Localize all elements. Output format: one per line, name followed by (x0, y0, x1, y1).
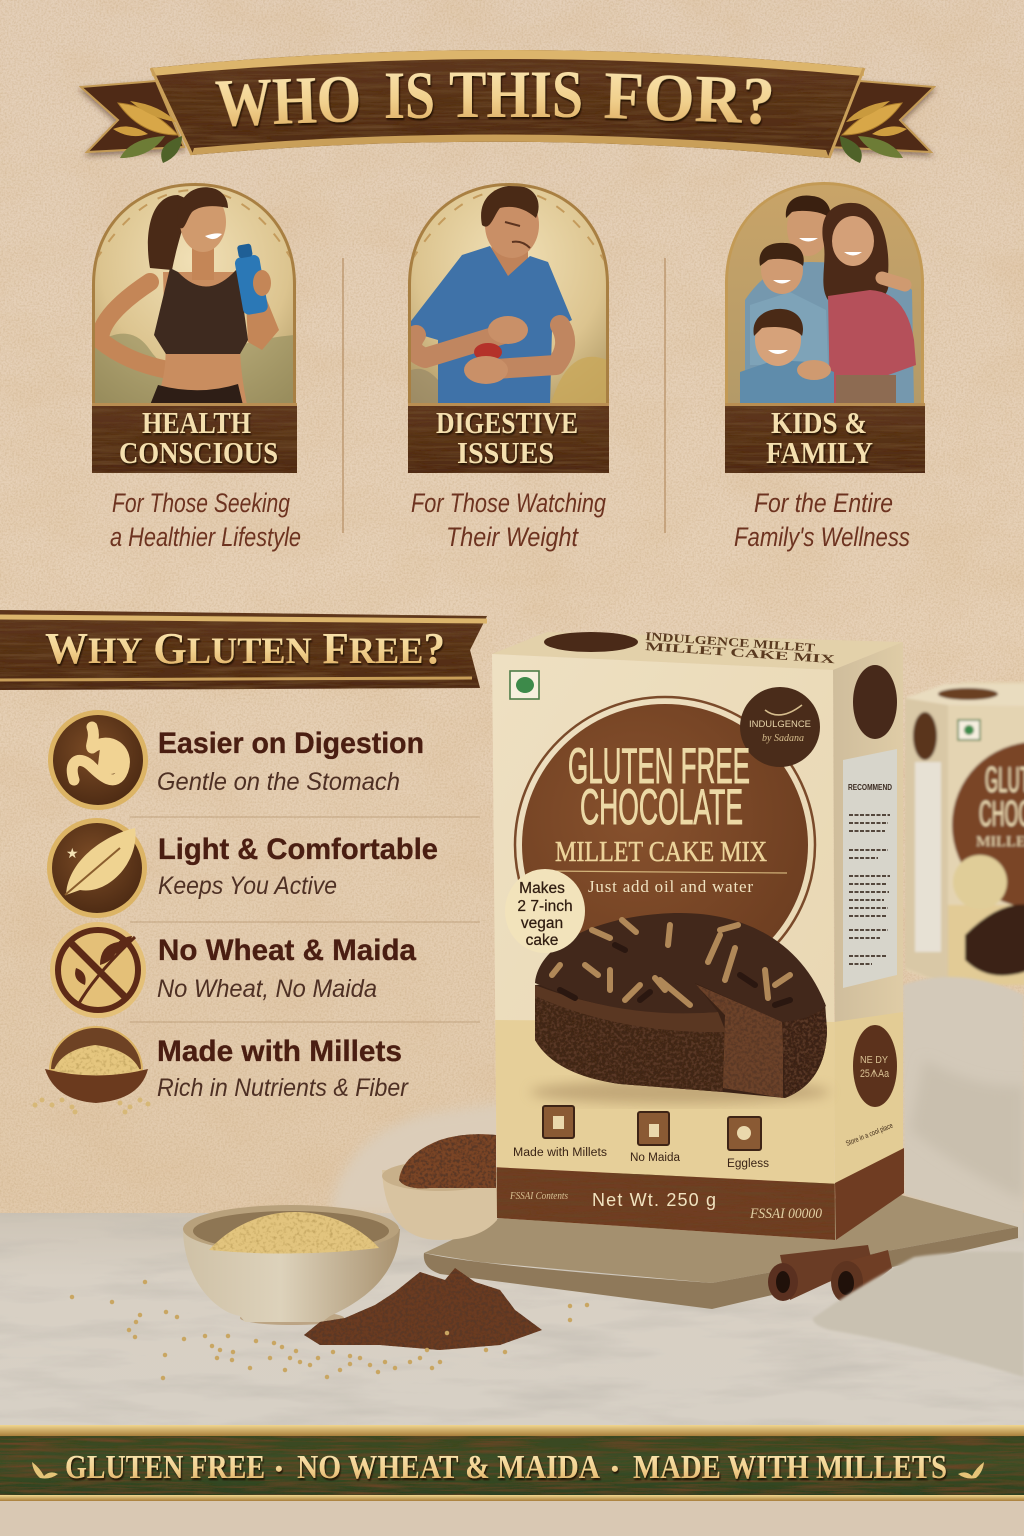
heading: No Wheat & Maida (158, 934, 416, 967)
strip text (65, 1449, 947, 1486)
arch illustration: family portrait (725, 180, 925, 410)
product name: CHOCOLATE (580, 779, 743, 835)
product name: Just add oil and water (588, 877, 753, 896)
makes badge: cake (526, 932, 558, 949)
net weight strip: Net Wt. 250 g (592, 1190, 716, 1210)
side net weight badge (853, 1025, 897, 1107)
net weight strip: FSSAI Contents (509, 1191, 568, 1202)
feature: made with millets (35, 1027, 410, 1112)
heading: Made with Millets (157, 1035, 402, 1068)
left arm (100, 282, 180, 372)
logo badge: by Sadana (762, 733, 804, 744)
icon: crossed wheat (50, 922, 146, 1018)
heading: Light & Comfortable (158, 833, 438, 866)
scattered millet grains (72, 1282, 587, 1378)
subtext: Gentle on the Stomach (157, 768, 400, 796)
label plate (725, 403, 925, 473)
caption: Their Weight (446, 522, 579, 552)
caption: For Those Watching (411, 488, 606, 518)
stone board (424, 1195, 1018, 1309)
scene: table surface (0, 1100, 1024, 1428)
label text (436, 405, 578, 470)
label text: HEALTH (142, 405, 251, 440)
boy two (740, 360, 834, 405)
label text: ISSUES (457, 435, 554, 470)
wheat left (113, 101, 182, 163)
side small print: Store in a cool place (844, 1121, 894, 1148)
feature icons on box: Made with Millets (513, 1147, 607, 1159)
right arm (246, 300, 279, 350)
hands (488, 316, 528, 344)
mom (822, 203, 889, 301)
caption (110, 488, 301, 552)
right arm (480, 325, 565, 370)
head (180, 206, 226, 252)
side info panel (843, 749, 897, 988)
title: WHO (214, 60, 362, 141)
neck (192, 248, 214, 272)
label text: KIDS & (771, 405, 867, 440)
strip text: • (275, 1456, 283, 1481)
box side (833, 642, 903, 1240)
product name: MILLET CAKE MIX (555, 837, 767, 868)
icon: bowl of millets (35, 1027, 148, 1112)
why gluten free banner (0, 610, 487, 690)
background box text: MILLE (976, 834, 1024, 850)
feature icons on box: No Maida (630, 1152, 681, 1164)
product name: GLUTEN FREE (568, 738, 750, 794)
head (485, 206, 539, 258)
card: health conscious (90, 180, 301, 552)
linen behind bowls (330, 1100, 520, 1215)
banner right tail (828, 81, 934, 152)
strip icon left (32, 1462, 58, 1478)
product box (490, 629, 904, 1245)
subtext: No Wheat, No Maida (157, 975, 377, 1003)
caption: For Those Seeking (112, 488, 290, 518)
makes badge: Makes (519, 880, 565, 897)
wheat right (840, 101, 907, 163)
cake right crust (782, 1008, 827, 1098)
torso (161, 272, 246, 403)
boy one (750, 292, 828, 365)
cocoa pile (304, 1268, 542, 1350)
label text (119, 405, 278, 470)
cocoa heap (399, 1134, 496, 1188)
side net weight badge: 25ᗑAa (860, 1068, 890, 1080)
logo badge: INDULGENCE (749, 719, 811, 730)
feature: no wheat and maida (50, 922, 416, 1018)
side logo (853, 665, 897, 739)
shorts (150, 384, 242, 403)
divider lines (343, 258, 665, 533)
folded cloth lower right (813, 1252, 1024, 1377)
caption (411, 488, 606, 552)
hand on bottle (253, 270, 271, 296)
cake glaze band (535, 985, 726, 1032)
title: THIS (449, 56, 583, 132)
large millet bowl (183, 1205, 400, 1325)
icon: stomach (48, 710, 148, 810)
side info panel: RECOMMEND (848, 783, 892, 792)
title: IS (384, 57, 435, 133)
subtext: Keeps You Active (158, 872, 337, 900)
card: kids and family (725, 180, 925, 552)
logo badge (740, 687, 820, 767)
left arm (412, 332, 510, 358)
banner left tail (81, 81, 184, 152)
neck (491, 246, 528, 276)
icon: leaf: ★ (66, 847, 79, 862)
linen cloth right (903, 977, 1024, 1240)
cake top (535, 913, 826, 1022)
background box text (976, 759, 1024, 850)
net weight strip: FSSAI 00000 (749, 1206, 822, 1222)
caption: For the Entire (754, 488, 893, 518)
card: digestive issues (404, 180, 615, 552)
feature icons on box: Eggless (727, 1158, 769, 1170)
product name (543, 738, 787, 896)
cake (530, 913, 830, 1104)
millet grains in bowl (209, 1212, 379, 1254)
label text (766, 405, 873, 470)
brown disc (515, 697, 815, 993)
box top text: MILLET CAKE MIX (645, 639, 836, 666)
box front (492, 654, 835, 1240)
makes badge: vegan (521, 915, 563, 932)
title banner (81, 50, 934, 163)
side net weight badge: NE DY (860, 1055, 888, 1066)
bottom strip (0, 1425, 1024, 1536)
box top text: INDULGENCE MILLET (645, 629, 815, 655)
title: FOR? (602, 57, 776, 139)
arch illustration: man holding stomach (404, 180, 615, 410)
box top text (645, 629, 836, 666)
cake left crust (535, 994, 725, 1092)
box top (492, 632, 903, 670)
makes badge: 2 7-inch (517, 898, 573, 915)
shirt (404, 246, 572, 405)
net weight strip (509, 1190, 822, 1222)
arch illustration: woman with bottle (90, 180, 300, 410)
FSSAI veg mark (510, 671, 539, 699)
section heading: WHY GLUTEN FREE? (45, 624, 445, 673)
strip text: GLUTEN FREE (65, 1449, 265, 1486)
strip icon right (958, 1462, 984, 1478)
subtext: Rich in Nutrients & Fiber (157, 1074, 410, 1102)
label plate (92, 403, 297, 473)
chocolate rolls (768, 1245, 892, 1303)
small cocoa bowl (382, 1134, 498, 1240)
label text: DIGESTIVE (436, 405, 578, 440)
heading: Easier on Digestion (158, 727, 424, 760)
icon: leaf (47, 818, 147, 918)
cake cut face (695, 984, 783, 1098)
feature: easier on digestion (48, 710, 424, 810)
bottle (234, 244, 268, 315)
label plate (408, 403, 609, 473)
mother's hand (797, 360, 831, 380)
banner plaque (151, 50, 864, 158)
feature: light and comfortable (47, 818, 438, 918)
ponytail (148, 195, 184, 270)
background product box (905, 682, 1024, 985)
makes badge (505, 869, 585, 953)
caption: a Healthier Lifestyle (110, 522, 301, 552)
red stomach (474, 343, 502, 358)
strip text: MADE WITH MILLETS (633, 1449, 947, 1486)
cake underlay (535, 975, 827, 1098)
dad (745, 262, 914, 405)
strip text: NO WHEAT & MAIDA (297, 1449, 600, 1486)
caption: Family's Wellness (734, 522, 910, 552)
strip text: • (611, 1456, 619, 1481)
title (214, 56, 776, 141)
chocolate shards (552, 920, 790, 1005)
caption (734, 488, 910, 552)
label text: FAMILY (766, 435, 873, 470)
sports top (154, 268, 248, 354)
feature icons on box (513, 1106, 769, 1170)
label text: CONSCIOUS (119, 435, 278, 470)
